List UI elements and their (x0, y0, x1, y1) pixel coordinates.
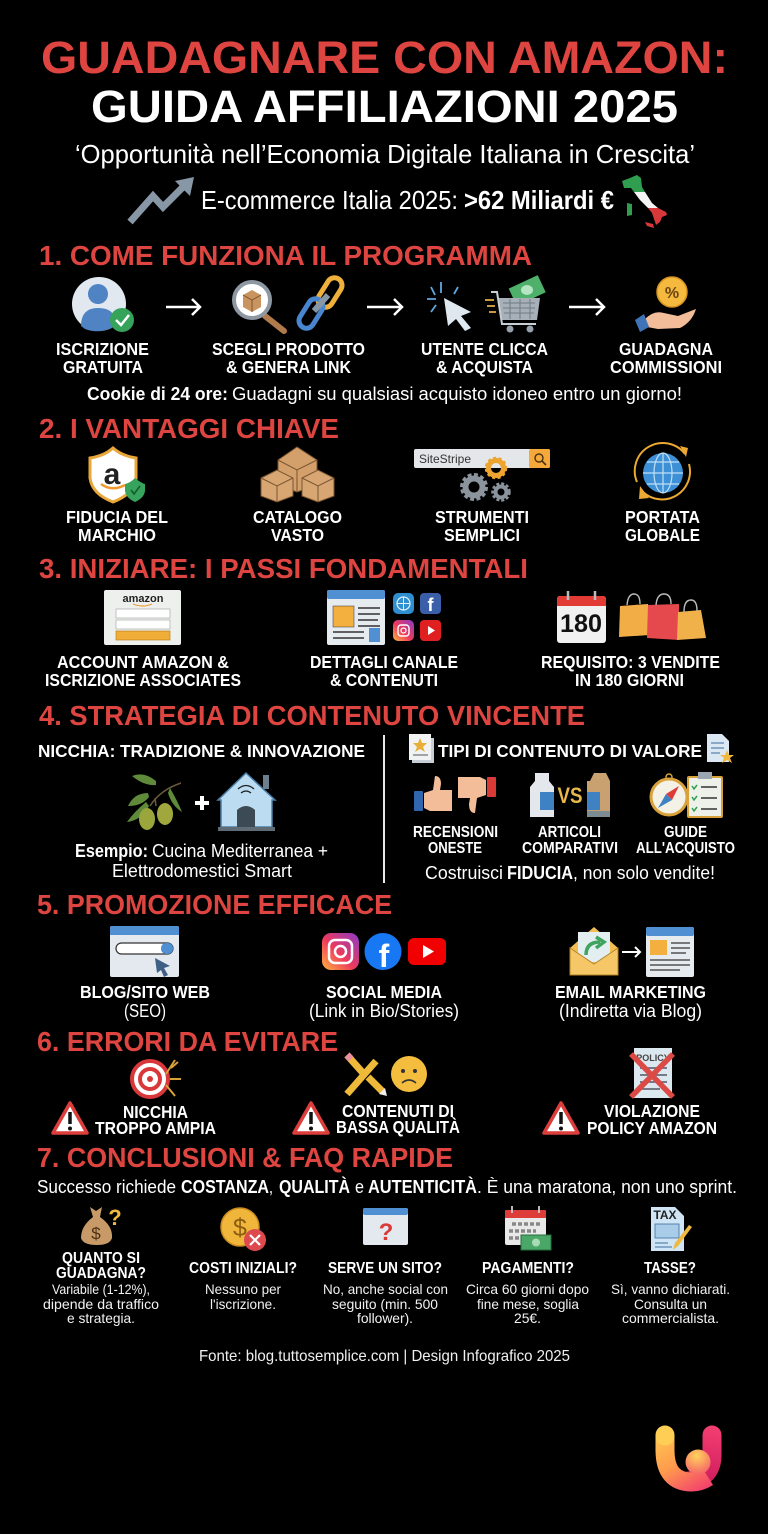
cookie note: Cookie di 24 ore: (87, 384, 228, 404)
conclusion sentence: COSTANZA (181, 1177, 269, 1197)
faq: tasse: commercialista. (622, 1310, 719, 1326)
panel: section 3 iniziare (39, 553, 720, 690)
icon: amazon login card (104, 590, 181, 645)
subtitle: ‘Opportunità nell’Economia Digitale Italiana in Crescita’ (75, 139, 695, 169)
example text: Cucina Mediterranea + (152, 841, 328, 861)
trust note: , non solo vendite! (573, 863, 715, 883)
icon: money bag: $ (91, 1224, 101, 1243)
icon: amazon shield: a (104, 458, 121, 491)
icon: tax document (651, 1207, 692, 1251)
icon: email envelope (570, 927, 618, 975)
content type labels: RECENSIONI (413, 824, 498, 841)
panel: section 1 come funziona (39, 240, 722, 404)
icon: magnifier and box (234, 282, 284, 331)
faq: costi iniziali: COSTI INIZIALI? (189, 1260, 297, 1277)
icon: shopping cart with money (485, 275, 546, 332)
title: GUIDA AFFILIAZIONI 2025 (91, 81, 678, 132)
conclusion sentence: AUTENTICITÀ (368, 1176, 477, 1197)
icon: cardboard boxes (261, 447, 334, 502)
icon: browser with question mark: ? (379, 1219, 393, 1246)
advantage labels: PORTATA (625, 507, 700, 527)
statistic text: E-commerce Italia 2025: (201, 185, 458, 215)
heading: 5. PROMOZIONE EFFICACE (37, 889, 392, 920)
logo (665, 1435, 712, 1482)
faq: serve un sito: No, anche social con (323, 1281, 448, 1297)
step labels: GUADAGNA (619, 339, 713, 359)
faq: tasse: Consulta un (634, 1296, 707, 1312)
icon: blog page (646, 927, 694, 977)
icon: crossed out policy document: POLICY (636, 1053, 670, 1063)
icon: percent coin and hand (635, 277, 696, 332)
step labels: ISCRIZIONE ASSOCIATES (45, 670, 241, 690)
label: contenuti di bassa qualita (336, 1101, 460, 1137)
label: violazione policy: POLICY AMAZON (587, 1118, 717, 1138)
faq: quanto si guadagna: dipende da traffico (43, 1296, 159, 1312)
icons: channel tiles (393, 593, 441, 641)
icon: bottle vs carton: VS (558, 783, 582, 808)
icon: browser with question mark (363, 1208, 408, 1246)
icon: SiteStripe bar and gears (414, 449, 550, 500)
conclusion sentence: Successo richiede (37, 1177, 176, 1197)
step labels: ACCOUNT AMAZON & (57, 652, 229, 672)
icon: percent coin and hand: % (665, 285, 679, 302)
title (41, 32, 728, 132)
content type labels: ONESTE (428, 840, 482, 857)
panel: section 2 vantaggi (39, 413, 700, 545)
example text: Elettrodomestici Smart (112, 861, 292, 881)
faq: pagamenti: PAGAMENTI? (482, 1260, 574, 1277)
icon: warning triangle (53, 1103, 87, 1133)
icon: compass and checklist (651, 772, 722, 817)
heading: 1. COME FUNZIONA IL PROGRAMMA (39, 240, 532, 271)
faq: pagamenti (466, 1260, 589, 1326)
icon: bottle vs carton (530, 773, 610, 817)
channel labels: (Link in Bio/Stories) (309, 1001, 459, 1021)
icon: social media logos (322, 933, 446, 974)
faq: costi iniziali: l'iscrizione. (210, 1296, 276, 1312)
faq: quanto si guadagna: GUADAGNA? (56, 1265, 146, 1282)
icons: channel tiles: f (428, 595, 434, 615)
icon: shopping bags (619, 594, 706, 640)
faq: costi iniziali (189, 1260, 297, 1312)
faq: pagamenti: fine mese, soglia (477, 1296, 579, 1312)
trust note: FIDUCIA (507, 863, 573, 883)
step labels: UTENTE CLICCA (421, 339, 548, 359)
step labels: IN 180 GIORNI (575, 670, 684, 690)
conclusion sentence: . È una maratona, non uno sprint. (477, 1177, 737, 1197)
step labels: REQUISITO: 3 VENDITE (541, 652, 720, 672)
panel: section 7 conclusioni e faq (37, 1142, 737, 1326)
icon: olive branch (127, 774, 182, 830)
faq: pagamenti: 25€. (514, 1310, 541, 1326)
label: contenuti di bassa qualita: CONTENUTI DI (342, 1101, 454, 1121)
faq: quanto si guadagna: Variabile (1-12%), (52, 1281, 150, 1297)
icon: document with star left (409, 734, 434, 763)
icon: user signup (72, 277, 134, 332)
arrow (367, 299, 402, 315)
advantage labels: STRUMENTI (435, 507, 529, 527)
channel labels: SOCIAL MEDIA (326, 982, 442, 1002)
icon: tax document: TAX (653, 1208, 677, 1222)
icon: coin with x badge (221, 1208, 266, 1251)
step labels: & ACQUISTA (436, 357, 533, 377)
panel: section 6 errori (37, 1026, 717, 1138)
icon: amazon shield (90, 448, 145, 502)
heading: 7. CONCLUSIONI & FAQ RAPIDE (37, 1142, 453, 1173)
icon: amazon login card: amazon (123, 593, 164, 605)
icon: money bag: ? (108, 1205, 122, 1230)
icon: crossed out policy document (631, 1048, 673, 1098)
icon: document with star right (707, 734, 734, 763)
icon: warning triangle (294, 1103, 328, 1133)
label: nicchia troppo ampia (95, 1102, 216, 1138)
example text: Esempio: (75, 841, 148, 861)
faq: quanto si guadagna (43, 1250, 159, 1326)
faq: tasse: Sì, vanno dichiarati. (611, 1281, 730, 1297)
plus sign (195, 796, 209, 810)
advantage labels: SEMPLICI (444, 525, 520, 545)
icon: calendar 180 (557, 591, 606, 643)
step labels (45, 652, 720, 690)
faq: tasse: TASSE? (644, 1260, 696, 1277)
trust note (425, 863, 715, 883)
statistic text: >62 Miliardi € (464, 185, 614, 215)
advantage labels: FIDUCIA DEL (66, 507, 168, 527)
step labels: & CONTENUTI (330, 670, 438, 690)
faq: serve un sito (323, 1260, 448, 1326)
conclusion sentence: , (269, 1177, 273, 1197)
label: violazione policy: VIOLAZIONE (604, 1101, 700, 1121)
faq: quanto si guadagna: e strategia. (67, 1310, 135, 1326)
icon: SiteStripe bar and gears: SiteStripe (419, 452, 471, 466)
icon: smart house (218, 773, 275, 831)
channel labels: BLOG/SITO WEB (80, 982, 210, 1002)
step labels: & GENERA LINK (226, 357, 351, 377)
panel: section 5 promozione (37, 889, 706, 1021)
icon: warning triangle (544, 1103, 578, 1133)
heading: 6. ERRORI DA EVITARE (37, 1026, 338, 1057)
advantage labels: GLOBALE (625, 525, 700, 545)
content type labels: GUIDE (664, 824, 707, 841)
conclusion sentence: QUALITÀ (279, 1176, 350, 1197)
label: nicchia troppo ampia: TROPPO AMPIA (95, 1118, 216, 1138)
heading: 4. STRATEGIA DI CONTENUTO VINCENTE (39, 700, 585, 731)
faq: tasse (611, 1260, 730, 1326)
step labels: ISCRIZIONE (56, 339, 149, 359)
sub-heading: tipi di contenuto: TIPI DI CONTENUTO DI VALORE (438, 741, 702, 761)
step labels: DETTAGLI CANALE (310, 652, 458, 672)
icon: Italy map (622, 175, 667, 228)
example text (75, 841, 328, 881)
icon: growth arrow (130, 177, 194, 222)
icon: browser search (110, 926, 179, 977)
panel: section 4 strategia (38, 700, 735, 883)
icon: social media logos: f (379, 938, 390, 974)
advantage labels: CATALOGO (253, 507, 342, 527)
content type labels: COMPARATIVI (522, 840, 618, 857)
icon: web page layout (327, 590, 385, 645)
step labels: GRATUITA (63, 357, 143, 377)
icon: chain link (296, 275, 345, 331)
faq: serve un sito: seguito (min. 500 (332, 1296, 438, 1312)
icon: thumbs up and down (414, 776, 496, 813)
heading: 3. INIZIARE: I PASSI FONDAMENTALI (39, 553, 528, 584)
label: contenuti di bassa qualita: BASSA QUALITÀ (336, 1116, 460, 1137)
step labels (56, 339, 722, 377)
content type labels: ARTICOLI (538, 824, 601, 841)
trust note: Costruisci (425, 863, 503, 883)
step labels: SCEGLI PRODOTTO (212, 339, 365, 359)
footer source: Fonte: blog.tuttosemplice.com | Design Infografico 2025 (199, 1348, 570, 1365)
content type labels: ALL'ACQUISTO (636, 840, 735, 857)
icon: sad face (391, 1056, 427, 1092)
icon: coin with x badge: $ (233, 1214, 247, 1242)
content type labels (413, 824, 735, 857)
heading: 2. I VANTAGGI CHIAVE (39, 413, 339, 444)
icon: target (132, 1060, 181, 1097)
title: GUADAGNARE CON AMAZON: (41, 32, 728, 83)
arrow (622, 947, 640, 957)
icon: broken pencil (347, 1055, 387, 1096)
arrow (569, 299, 604, 315)
advantage labels (66, 507, 700, 545)
faq: serve un sito: SERVE UN SITO? (328, 1260, 442, 1277)
conclusion sentence (37, 1176, 737, 1197)
channel labels: (Indiretta via Blog) (559, 1001, 702, 1021)
channel labels: (SEO) (124, 1001, 166, 1021)
e-commerce statistic (130, 175, 667, 228)
faq: quanto si guadagna: QUANTO SI (62, 1250, 140, 1267)
advantage labels: VASTO (271, 525, 324, 545)
faq: serve un sito: follower). (357, 1310, 413, 1326)
icon: calendar with cash (505, 1206, 551, 1250)
channel labels (80, 982, 706, 1021)
icon: money bag (81, 1205, 122, 1245)
advantage labels: MARCHIO (78, 525, 156, 545)
channel labels: EMAIL MARKETING (555, 982, 706, 1002)
icon: globe with arrows (635, 443, 690, 499)
icon: calendar 180: 180 (560, 610, 602, 638)
faq: costi iniziali: Nessuno per (205, 1281, 281, 1297)
conclusion sentence: e (355, 1177, 364, 1197)
step labels: COMMISSIONI (610, 357, 722, 377)
arrow (166, 299, 200, 315)
cookie note: Guadagni su qualsiasi acquisto idoneo entro un giorno! (232, 384, 682, 404)
sub-heading: nicchia: NICCHIA: TRADIZIONE & INNOVAZIONE (38, 741, 365, 761)
statistic text (201, 185, 614, 215)
icon: cursor click (427, 282, 471, 331)
label: nicchia troppo ampia: NICCHIA (123, 1102, 188, 1122)
faq: pagamenti: Circa 60 giorni dopo (466, 1281, 589, 1297)
label: violazione policy (587, 1101, 717, 1138)
